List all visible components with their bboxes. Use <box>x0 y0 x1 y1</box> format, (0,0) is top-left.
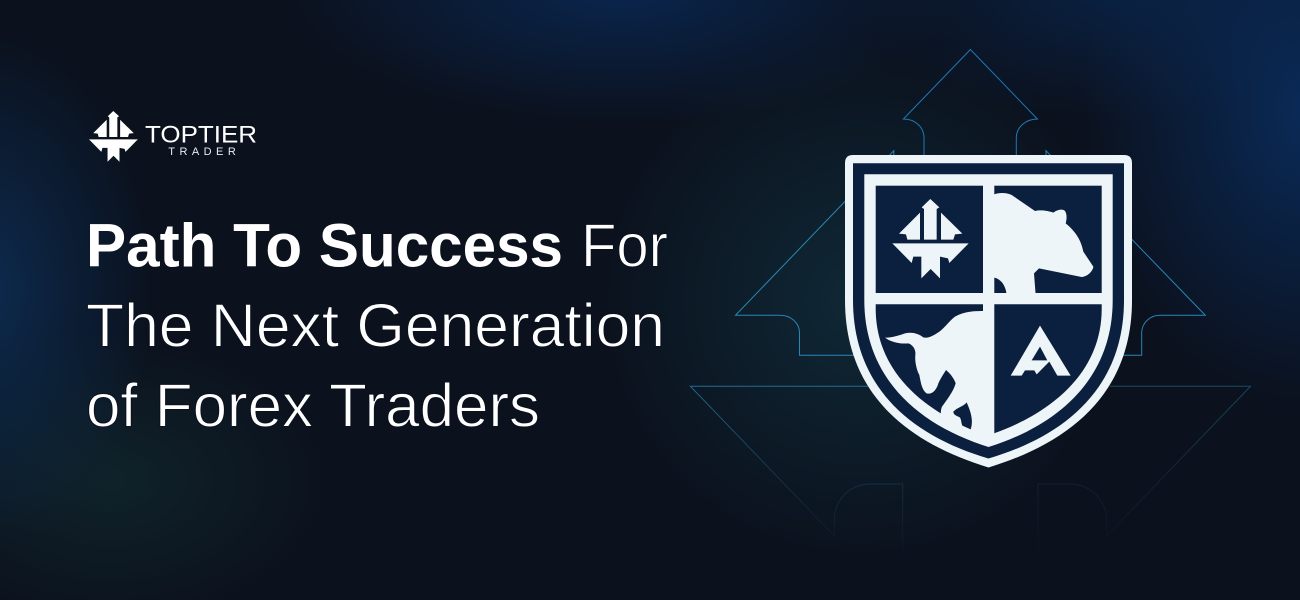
arrow outline: bottom right <box>1038 386 1250 556</box>
icon: logo mark <box>89 111 138 162</box>
arrow outline: top <box>903 50 1037 165</box>
logo wordmark: TOPTIER <box>145 121 257 148</box>
arrow outlines behind shield <box>690 50 1250 556</box>
icon: bull <box>885 311 985 437</box>
panel: top left <box>876 186 983 293</box>
panel: bottom left <box>876 304 983 433</box>
title line 2: The Next Generation <box>86 292 665 360</box>
panel: bottom right <box>994 304 1102 433</box>
icon: bear <box>992 193 1093 295</box>
arrow outline: bottom left <box>690 386 903 556</box>
icon: letter A <box>1011 326 1071 376</box>
shield outer white <box>845 155 1132 468</box>
title line 3: of Forex Traders <box>86 372 540 440</box>
panel: top right <box>994 186 1102 293</box>
icon: logo mark in shield <box>892 199 969 278</box>
logo subtitle: TRADER <box>168 146 236 158</box>
brand logo <box>89 111 257 162</box>
title line 1 end: For <box>581 212 668 280</box>
title <box>86 212 668 440</box>
arrow outline: middle left <box>736 151 894 355</box>
arrow outline: middle right <box>1046 151 1205 355</box>
shield emblem <box>845 155 1132 468</box>
title line 1 bold: Path To Success <box>86 212 563 280</box>
shield inner white <box>864 174 1113 447</box>
shield navy band <box>853 163 1124 459</box>
